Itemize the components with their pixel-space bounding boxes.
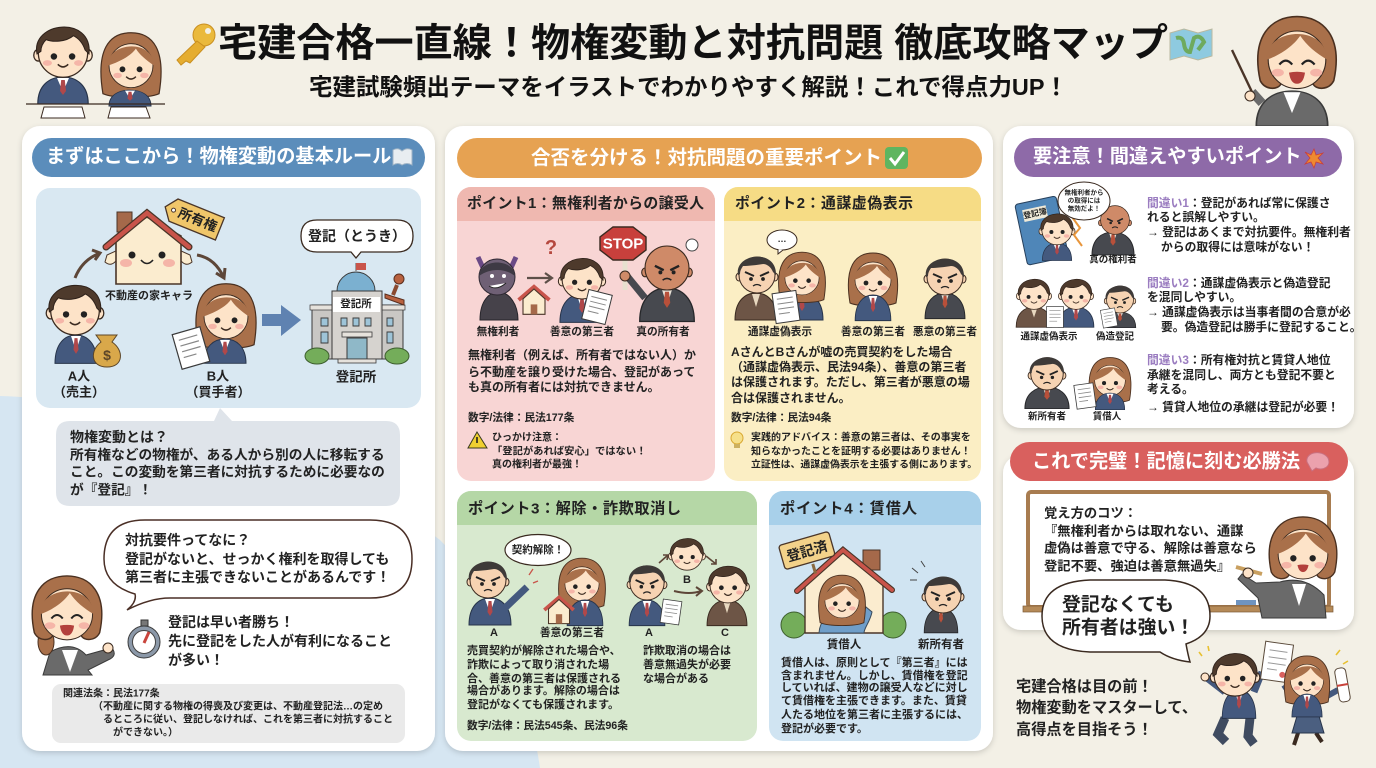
- label: B: （買手者）: [185, 384, 251, 400]
- text: mistake 3: 考える。: [1147, 382, 1194, 396]
- text: point 4 body: [781, 655, 968, 735]
- card: point 2: [724, 187, 981, 481]
- label: B: B人: [207, 368, 229, 384]
- text: closing message: 高得点を目指そう！: [1016, 720, 1153, 738]
- callout: what is real right change: が『登記』！: [70, 482, 152, 498]
- captions: point 3: 善意の第三者: [540, 626, 604, 639]
- icon: stop sign: STOP: [603, 236, 643, 252]
- icon: money bag: $: [103, 347, 111, 363]
- chalkboard: memory tip: 虚偽は善意で守る、解除は善意なら: [1044, 540, 1257, 556]
- captions: point 2: 善意の第三者: [841, 325, 905, 338]
- caption: registry: 登記所: [336, 370, 377, 384]
- label: A: [53, 368, 105, 400]
- text: closing message: [1016, 678, 1197, 738]
- text: first to register wins: が多い！: [168, 652, 224, 668]
- captions: point 1: 善意の第三者: [550, 325, 614, 338]
- text: mistake 1: からの取得には意味がない！: [1161, 240, 1314, 254]
- illustration: mistake 1: の取得には: [1068, 196, 1101, 204]
- label: ownership tag: 所有権: [176, 204, 220, 235]
- illustration: mistake 1: [1015, 182, 1137, 266]
- caption: house character: 不動産の家キャラ: [105, 288, 193, 302]
- speech bubble: registration: 登記（とうき）: [308, 228, 406, 244]
- text: fraud body: 詐欺取消の場合は: [643, 643, 731, 657]
- person A: [46, 285, 104, 363]
- speech bubble: rescission: 契約解除！: [512, 543, 564, 556]
- illustration: mistake 3: 新所有者: [1028, 410, 1066, 422]
- text: point 2 body: AさんとBさんが嘘の売買契約をした場合: [731, 344, 952, 359]
- chalkboard: memory tip: 覚え方のコツ：: [1044, 504, 1137, 520]
- text: rescission body: 詐欺によって取り消された場: [467, 657, 609, 671]
- text: point 1 law: 数字/法律：民法177条: [468, 411, 575, 424]
- icon: question mark: ?: [545, 237, 557, 259]
- panel: common mistakes: [1003, 126, 1362, 428]
- icon: map: [1170, 29, 1212, 60]
- callout: what is real right change: [56, 408, 400, 506]
- text: fraud body: [643, 643, 731, 685]
- illustration: mistake 2: 偽造登記: [1096, 330, 1134, 342]
- text: point 1 body: ら不動産を譲り受けた場合、登記があって: [468, 364, 695, 379]
- illustration: jumping students: [1199, 641, 1351, 745]
- icon: money bag: [93, 335, 120, 367]
- captions: point 1: 真の所有者: [636, 325, 690, 338]
- text: closing message: 宅建合格は目の前！: [1016, 678, 1153, 696]
- text: point 2 body: （通謀虚偽表示、民法94条）、善意の第三者: [731, 359, 966, 374]
- text: point 2 law: 数字/法律：民法94条: [731, 411, 832, 424]
- label: ownership tag: [161, 196, 224, 240]
- heading: common mistakes: [1014, 138, 1342, 177]
- captions: point 4: 新所有者: [918, 637, 964, 651]
- captions: point 3: C: [721, 627, 729, 639]
- illustration: non-right holder: [478, 257, 549, 320]
- card: point 3: [457, 491, 757, 741]
- illustration: conspirators: [735, 230, 825, 324]
- text: point 4 body: て賃借権を主張できます。また、賃貸: [781, 693, 967, 707]
- chalkboard: memory tip: 『無権利者からは取れない、通謀: [1044, 522, 1244, 538]
- icon: stopwatch: [128, 620, 160, 658]
- arrow: A to house: [75, 250, 100, 278]
- illustration: teacher explaining: [32, 576, 114, 675]
- captions: point 3: [490, 574, 729, 639]
- card: point 1: [457, 187, 715, 481]
- sign: registered: [778, 531, 839, 581]
- illustration: rescinding party A: [467, 562, 538, 625]
- text: mistake 2: 要。偽造登記は勝手に登記すること。: [1161, 320, 1362, 334]
- illustration: good-faith third party: [558, 258, 612, 324]
- text: mistake 3: → 賃貸人地位の承継は登記が必要！: [1147, 400, 1339, 414]
- heading: key points: [457, 138, 982, 178]
- text: point 2 body: は保護されます。ただし、第三者が悪意の場: [731, 374, 970, 389]
- header illustration: teacher with pointer: [1232, 17, 1336, 126]
- illustration: mistake 3: [1025, 357, 1131, 422]
- icon: contract: [172, 327, 210, 369]
- text: point 4 body: していれば、建物の譲受人などに対し: [781, 680, 968, 694]
- illustration: fraud chain: [627, 539, 749, 626]
- text: point 2 body: 合は保護されません。: [731, 390, 851, 405]
- text: point 1 body: [468, 347, 696, 394]
- text: point 1 body: 無権利者（例えば、所有者ではない人）か: [468, 347, 696, 362]
- box: related law: るところに従い、登記しなければ、これを第三者に対抗すること: [103, 712, 393, 726]
- arrow: house to B: [197, 255, 225, 278]
- text: point 4 body: 人たる地位を第三者に主張するには、: [781, 707, 968, 721]
- subtitle: 宅建試験頻出テーマをイラストでわかりやすく解説！これで得点力UP！: [309, 74, 1068, 100]
- illustration: good-faith woman: [848, 253, 898, 321]
- text: mistake 1: [1147, 196, 1351, 254]
- box: related law: 関連法条：民法177条: [63, 686, 160, 700]
- text: point 1 trap: [492, 430, 646, 470]
- text: mistake 3: [1147, 353, 1339, 414]
- box: related law: ができない。）: [113, 726, 178, 738]
- text: first to register wins: [168, 614, 392, 668]
- panel: memorization: [1003, 442, 1354, 630]
- callout: what is real right change: 物権変動とは？: [70, 429, 168, 445]
- illustration: mistake 3: 賃借人: [1093, 410, 1122, 422]
- captions: point 2: 通謀虚偽表示: [748, 325, 812, 338]
- text: mistake 2: → 通謀虚偽表示は当事者間の合意が必: [1147, 305, 1351, 319]
- text: mistake 3: 間違い3：所有権対抗と賃貸人地位: [1147, 353, 1331, 367]
- captions: point 3: B: [683, 574, 691, 586]
- speech bubble: owner is strong: 所有者は強い！: [1062, 616, 1194, 638]
- text: mistake 2: を混同しやすい。: [1147, 290, 1241, 304]
- icon: registry building: [305, 263, 409, 364]
- heading: memorization: これで完璧！記憶に刻む必勝法: [1032, 450, 1300, 472]
- card: point 4: [769, 491, 981, 741]
- icon: warning: [468, 432, 487, 448]
- illustration: mistake 1: 真の権利者: [1089, 254, 1137, 266]
- captions: point 3: A: [645, 627, 653, 639]
- captions: point 4: 賃借人: [827, 637, 862, 651]
- illustration: mistake 1: 無効だよ！: [1068, 204, 1100, 212]
- text: rescission body: 場合があります。解除の場合は: [467, 683, 620, 697]
- text: mistake 2: 間違い2：通謀虚偽表示と偽造登記: [1147, 276, 1331, 290]
- captions: point 2: 悪意の第三者: [913, 325, 977, 338]
- box: related law: [52, 684, 405, 743]
- label: B: [185, 368, 251, 400]
- illustration: bad-faith man: [924, 259, 966, 319]
- label: A: （売主）: [53, 384, 105, 400]
- illustration: mistake 2: [1016, 279, 1136, 342]
- chalkboard: memory tip: [1023, 492, 1333, 612]
- captions: point 2: [748, 325, 977, 338]
- captions: point 1: 無権利者: [477, 325, 520, 338]
- speech bubble: perfection requirements: 登記がないと、せっかく権利を取得しても: [125, 551, 389, 567]
- text: mistake 1: れると誤解しやすい。: [1147, 210, 1265, 224]
- callout: what is real right change: こと。この変動を第三者に対抗するために必要なの: [70, 464, 385, 480]
- text: closing message: 物権変動をマスターして、: [1016, 698, 1197, 716]
- illustration: third party with house: [544, 558, 605, 626]
- person B: [196, 284, 256, 363]
- icon: house character: [105, 212, 192, 284]
- label: A: A人: [68, 368, 90, 384]
- panel: key points: [445, 126, 993, 751]
- card: point 1: ポイント1：無権利者からの譲受人: [467, 194, 704, 212]
- text: rescission body: 売買契約が解除された場合や、: [467, 643, 621, 657]
- speech bubble: owner is strong: 登記なくても: [1062, 594, 1174, 616]
- captions: point 3: A: [490, 627, 498, 639]
- arrow: to registry: [262, 305, 301, 336]
- text: point 2 advice: 知らなかったことを証明する必要はありません！: [751, 444, 971, 458]
- illustration: new owner: [910, 561, 964, 633]
- text: point 2 advice: [751, 430, 977, 470]
- text: point 1 trap: 「登記があれば安心」ではない！: [492, 444, 646, 458]
- text: point 4 body: 含まれません。しかし、賃借権を登記: [781, 668, 968, 682]
- captions: point 4: [827, 637, 964, 651]
- text: point 1 trap: ひっかけ注意：: [492, 430, 562, 444]
- speech bubble: registration: [301, 220, 413, 258]
- illustration: mistake 2: 通謀虚偽表示: [1020, 330, 1078, 342]
- panel: basic rules: [22, 126, 435, 751]
- heading: memorization: [1010, 442, 1348, 481]
- illustration: true owner: [620, 239, 698, 321]
- illustration: mistake 1: 無権利者から: [1064, 188, 1104, 196]
- text: rescission body: 合、善意の第三者は保護される: [467, 671, 621, 685]
- text: point 1 body: も真の所有者には対抗できません。: [468, 379, 660, 394]
- speech bubble: perfection requirements: 第三者に主張できないことがあるんです！: [125, 569, 390, 585]
- header illustration: studying students: [26, 27, 165, 118]
- heading: basic rules: [32, 138, 425, 177]
- arrow: transfer: [527, 273, 552, 283]
- box: related law: （不動産に関する物権の得喪及び変更は、不動産登記法…の定め: [93, 700, 383, 712]
- icon: light bulb: [731, 432, 743, 448]
- text: mistake 1: 間違い1：登記があれば常に保護さ: [1147, 196, 1331, 210]
- illustration: mistake 1: 登記簿: [1022, 206, 1048, 221]
- text: first to register wins: 先に登記をした人が有利になること: [168, 633, 392, 649]
- speech bubble: rescission: [505, 534, 571, 566]
- text: point 2 advice: 実践的アドバイス：善意の第三者は、その事実を: [751, 430, 971, 444]
- card: point 3: ポイント3：解除・詐欺取消し: [468, 500, 681, 518]
- speech bubble: owner is strong: [1042, 580, 1210, 662]
- text: rescission body: 登記がなくても保護されます。: [467, 697, 619, 711]
- text: mistake 2: [1147, 276, 1362, 334]
- title: 宅建合格一直線！物権変動と対抗問題 徹底攻略マップ: [218, 22, 1168, 66]
- illustration: conspirators: …: [778, 234, 786, 244]
- text: fraud body: 善意無過失が必要: [643, 657, 731, 671]
- text: point 1 trap: 真の権利者が最強！: [492, 458, 582, 470]
- heading: common mistakes: 要注意！間違えやすいポイント: [1033, 144, 1302, 168]
- heading: basic rules: まずはここから！物権変動の基本ルール: [46, 146, 391, 168]
- text: first to register wins: 登記は早い者勝ち！: [168, 614, 294, 630]
- speech bubble: perfection requirements: 対抗要件ってなに？: [125, 532, 250, 548]
- chalkboard: memory tip: 登記不要、強迫は善意無過失』: [1044, 558, 1230, 574]
- text: point 3 law: 数字/法律：民法545条、民法96条: [467, 719, 628, 732]
- text: point 2 advice: 立証性は、通謀虚偽表示を主張する側にあります。: [751, 458, 977, 470]
- captions: point 1: [477, 325, 690, 338]
- text: mistake 3: 承継を混同し、両方とも登記不要と: [1147, 368, 1336, 382]
- card: point 2: ポイント2：通謀虚偽表示: [735, 194, 913, 212]
- text: mistake 1: → 登記はあくまで対抗要件。無権利者: [1147, 225, 1351, 239]
- illustration: tenant house: [781, 550, 906, 638]
- illustration: teacher at board: [1236, 517, 1337, 618]
- icon: registry building: 登記所: [340, 297, 372, 310]
- diagram: ownership transfer: [36, 188, 421, 408]
- speech bubble: perfection requirements: [104, 520, 412, 610]
- icon: stop sign: [600, 227, 646, 290]
- sign: registered: 登記済: [785, 538, 829, 564]
- icon: key: [177, 24, 215, 65]
- text: point 4 body: 登記が必要です。: [781, 721, 868, 735]
- text: point 4 body: 賃借人は、原則として『第三者』には: [781, 655, 968, 669]
- text: rescission body: [467, 643, 621, 711]
- heading: key points: 合否を分ける！対抗問題の重要ポイント: [531, 147, 882, 169]
- card: point 4: ポイント4：賃借人: [780, 500, 917, 518]
- text: point 2 body: [731, 344, 970, 405]
- callout: what is real right change: 所有権などの物権が、ある人から別の人に移転する: [70, 446, 385, 462]
- text: fraud body: な場合がある: [643, 671, 709, 685]
